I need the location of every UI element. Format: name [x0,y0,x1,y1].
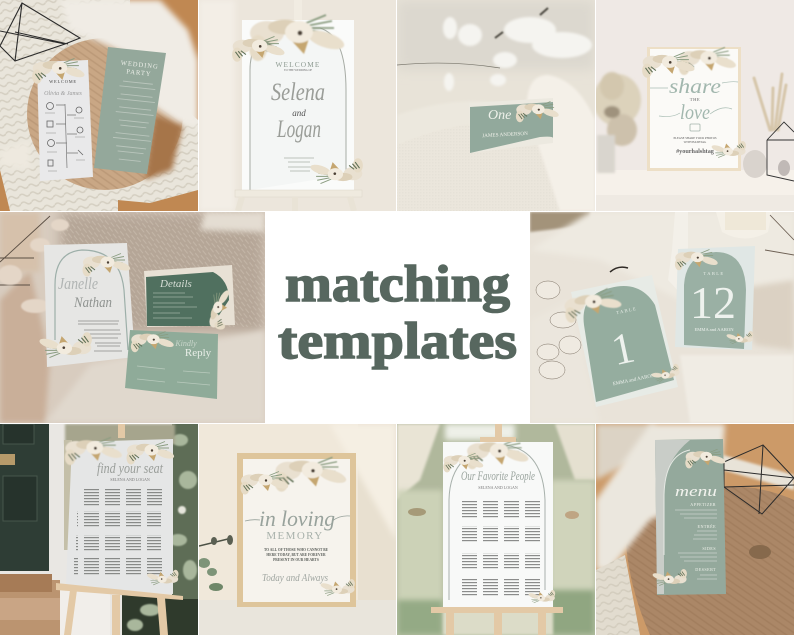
card: wedding party list: WEDDING [120,60,159,71]
card: welcome timeline: Olivia & James [44,91,82,97]
card: table 1 [562,275,681,407]
title line two: templates [278,313,517,370]
sign: welcome arch: Logan [276,116,321,143]
card: wedding party list [94,47,166,174]
frame: share the love [642,47,746,171]
frame: share the love: THE [690,97,700,102]
card: table 12 [675,246,755,350]
card: table 1: EMMA and AARON [613,374,656,387]
card: menu: ENTRÉE [698,524,716,529]
plant: dried grass stems and vases [743,74,794,181]
card: menu [652,439,726,595]
sign: our favorite people: SELENA AND LOGAN [478,485,518,490]
card: James Anderson place card: JAMES ANDERSON [482,131,528,139]
frame: in loving memory [237,453,356,607]
photo: share the love sign on shelf [593,0,794,211]
icon: black wire geometric ornament [724,445,794,514]
sign: welcome arch: Selena [271,79,325,106]
panel: heading [265,212,529,423]
card: menu: SIDES [702,546,716,551]
fur and knit [596,424,725,635]
photo: welcome and wedding party cards on a wooden board [0,0,198,211]
sign: our favorite people [443,439,555,607]
card: table 12: 12 [690,277,736,328]
card: welcome timeline [32,58,93,181]
plant stem [198,535,233,591]
photo: in loving memory frame [198,424,396,635]
card: kindly reply: Kindly [174,339,197,348]
candle holder [675,212,772,230]
sign: find your seat [65,437,179,594]
card: invitation Janelle and Nathan: Nathan [73,295,112,311]
frame: share the love: share [669,74,721,98]
card: kindly reply: Reply [185,347,212,359]
photo: place card on white linen [397,0,595,211]
sign: find your seat: find your seat [97,461,164,477]
photo: menu card on a wooden board [596,424,794,635]
easel [431,424,563,635]
card: menu: APPETIZER [690,502,716,507]
door [0,424,49,571]
card: details: Details [159,278,192,290]
icon: black wire geometric ornament [0,3,80,61]
sign: welcome arch [232,15,363,190]
frame: in loving memory: TO ALL OF THOSE WHO CANNOT BE [264,548,329,552]
sign: welcome arch: WELCOME [275,60,321,69]
frame: in loving memory: MEMORY [266,530,324,542]
photo: invitation suite on pampas and linen [0,212,265,423]
sign: find your seat: SELENA AND LOGAN [110,477,150,482]
photo: find your seat sign by front door [0,424,198,635]
card: table 1: TABLE [616,306,638,315]
card: details [144,265,235,331]
frame: share the love: PLEASE SHARE YOUR PHOTOS [673,136,717,140]
frame: share the love: love [680,100,710,124]
sign: welcome arch: and [292,108,306,118]
card: invitation Janelle and Nathan: Janelle [58,274,98,293]
sign: our favorite people: Our Favorite People [461,468,535,483]
easel ledge and legs [235,190,362,211]
photo: welcome sign on easel [199,0,396,211]
plant: dried pampas bouquet [593,72,641,173]
frame: share the love: WITH HASHTAG [684,140,707,144]
card: wedding party list: PARTY [126,68,152,78]
title line one: matching [285,256,510,313]
card: invitation Janelle and Nathan [38,243,135,367]
card: menu: DESSERT [695,567,716,572]
card: table 12: EMMA and AARON [694,327,734,332]
sign: welcome arch: TO THE WEDDING OF [284,69,312,72]
card: James Anderson place card [469,98,560,153]
card: welcome timeline: WELCOME [49,79,77,84]
frame: share the love: #yourhalshtag [676,148,715,155]
photo: table numbers on cream linen [530,212,794,423]
card: table 12: TABLE [703,271,725,276]
frame: in loving memory: PRESENT IN OUR HEARTS [273,558,319,562]
frame: in loving memory: Today and Always [262,572,328,584]
card: table 1: 1 [607,323,639,375]
easel [56,424,183,635]
frame: in loving memory: HERE TODAY, BUT ARE FOREVER [266,553,326,557]
photo: our favorite people seating chart in a garden [397,424,595,635]
card: menu: menu [675,484,717,500]
card: James Anderson place card: One [488,108,511,123]
frame: in loving memory: in loving [259,506,335,531]
card: kindly reply [125,330,218,399]
wooden board [626,487,794,635]
